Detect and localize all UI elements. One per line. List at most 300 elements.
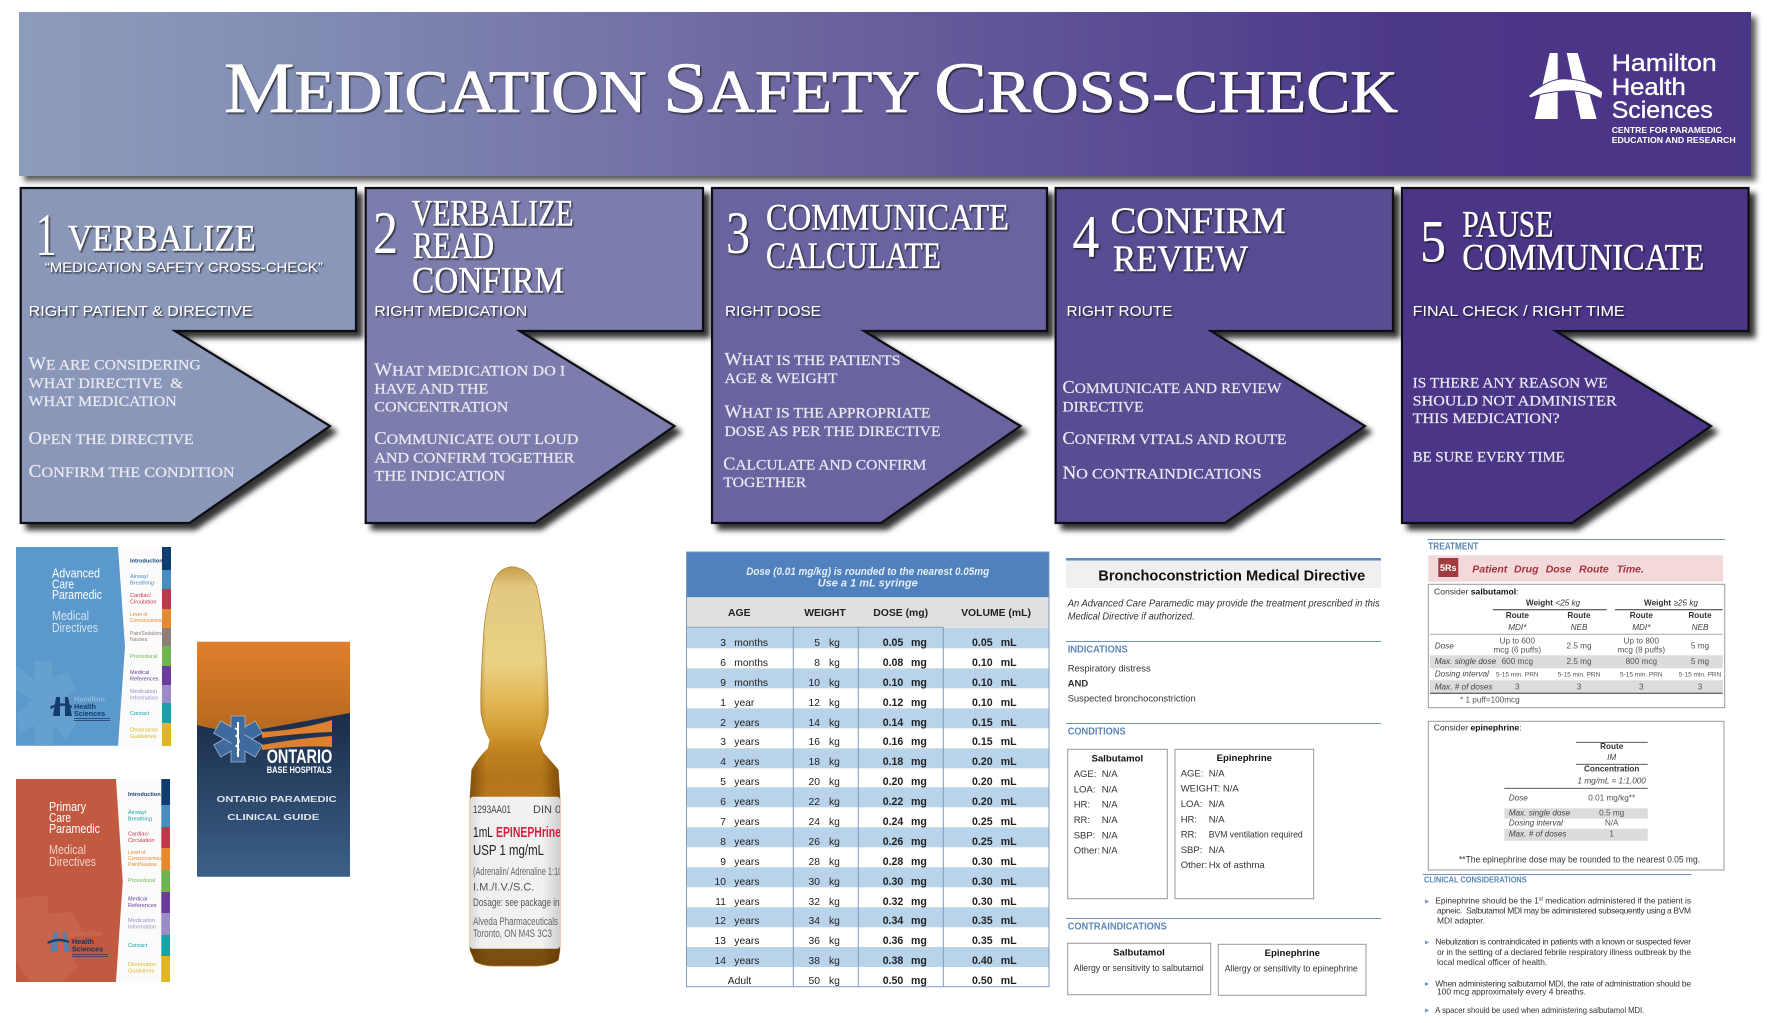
colour tabs	[161, 779, 170, 982]
salbutamol dosing table: Max. # of doses	[1435, 682, 1492, 691]
step 3 heading: 3	[726, 200, 750, 266]
volume column: 0.35	[972, 935, 993, 947]
weight column: 38	[809, 956, 820, 967]
weight column: kg	[829, 718, 840, 729]
age column: months	[734, 678, 768, 689]
step 5 body: THIS MEDICATION?	[1413, 411, 1560, 427]
volume column: 0.10	[972, 697, 993, 709]
dose column: 0.30	[883, 876, 903, 888]
step 4 heading: REVIEW	[1113, 239, 1248, 280]
salbutamol dosing table: 3	[1515, 682, 1520, 691]
epinephrine conditions box: BVM ventilation required	[1209, 830, 1303, 841]
title: MEDICATION SAFETY CROSS-CHECK	[224, 48, 1398, 128]
weight column: 34	[809, 916, 820, 927]
tab labels: Breathing	[130, 580, 154, 586]
treatment heading: TREATMENT	[1428, 541, 1478, 552]
contraindications section	[1066, 918, 1381, 995]
dose column	[883, 637, 927, 987]
salbutamol dosing table: 3	[1639, 682, 1644, 691]
weight column: kg	[829, 817, 840, 828]
label text	[473, 806, 560, 938]
weight column: 10	[809, 678, 820, 689]
logo wordmark: Sciences	[1612, 97, 1713, 124]
step 2 body	[374, 359, 578, 484]
step 2 heading: 2	[373, 200, 398, 266]
salbutamol dosing table: Weight ≥25 kg	[1644, 598, 1698, 607]
volume column: 0.20	[972, 756, 993, 768]
tab labels: Destination	[128, 962, 156, 968]
tab labels: Contact	[130, 711, 150, 717]
volume column: 0.25	[972, 816, 993, 828]
age column: 10	[715, 877, 726, 888]
salbutamol dosing table: 5-15 min. PRN	[1558, 672, 1601, 679]
step 3 body: WHAT IS THE APPROPRIATE	[724, 402, 930, 422]
step 1 heading	[29, 202, 323, 320]
consideration text: MDI adapter.	[1437, 915, 1485, 925]
weight column: 32	[809, 897, 820, 908]
label text: 1293AA01	[473, 804, 511, 816]
tab labels: Consciousness	[130, 618, 164, 624]
salbutamol dosing table: NEB	[1571, 623, 1588, 632]
column headers: AGE	[728, 608, 751, 619]
consideration text: A spacer should be used when administering salbutamol MDI.	[1435, 1005, 1644, 1015]
volume column: 0.30	[972, 856, 993, 868]
epinephrine conditions box	[1175, 749, 1314, 899]
arrow shape 3	[712, 188, 1047, 523]
column headers: VOLUME (mL)	[961, 608, 1031, 619]
logo wordmark: CENTRE FOR PARAMEDIC	[1612, 125, 1722, 135]
cover title: Care	[49, 810, 71, 825]
salbutamol dosing table: Max. single dose	[1435, 657, 1497, 666]
salbutamol dosing box	[1428, 584, 1725, 708]
epinephrine contraindication box	[1218, 944, 1366, 995]
dose column: mg	[911, 935, 927, 947]
volume column: mL	[1001, 915, 1017, 927]
clinical considerations	[1423, 874, 1692, 1015]
dose column: mg	[911, 876, 927, 888]
tab labels: Level of	[128, 850, 146, 856]
tab labels: Cardiac/	[130, 593, 151, 599]
step 4 body: COMMUNICATE AND REVIEW	[1062, 377, 1282, 397]
step 1 body: WE ARE CONSIDERING	[29, 354, 201, 374]
volume column: 0.20	[972, 796, 993, 808]
salbutamol dosing table: * 1 puff=100mcg	[1460, 696, 1520, 705]
cover title: Care	[52, 576, 74, 592]
5 Rs reminder bar: Dose	[1546, 564, 1572, 576]
tab labels: Introduction	[128, 792, 161, 798]
volume column: 0.40	[972, 955, 993, 967]
epinephrine conditions box: HR:	[1181, 814, 1197, 825]
age column: 12	[715, 916, 726, 927]
step 5 heading: FINAL CHECK / RIGHT TIME	[1413, 303, 1625, 320]
epinephrine conditions box: WEIGHT: N/A	[1181, 784, 1239, 795]
salbutamol conditions box: N/A	[1102, 830, 1118, 841]
epinephrine contraindication box: Allergy or sensitivity to epinephrine	[1225, 964, 1358, 975]
cover title: Paramedic	[52, 587, 102, 602]
step 2 body: THE INDICATION	[374, 468, 505, 484]
volume column: 0.15	[972, 717, 993, 729]
tab labels	[130, 558, 164, 740]
step 5 heading	[1413, 205, 1704, 320]
arrow shape 1	[21, 188, 356, 523]
volume column: mL	[1001, 955, 1017, 967]
book cover: primary care paramedic directives	[16, 779, 170, 982]
age column: years	[734, 857, 759, 868]
consideration text: When administering salbutamol MDI, the rate of administration should be	[1435, 978, 1691, 988]
epinephrine dosing table: 0.01 mg/kg**	[1588, 794, 1636, 803]
tab labels: Nausea	[130, 637, 147, 643]
weight column: kg	[829, 916, 840, 927]
age column: 2	[720, 718, 726, 729]
dose column: 0.38	[883, 955, 903, 967]
cover watermark	[16, 661, 78, 745]
salbutamol dosing table: 3	[1577, 682, 1582, 691]
step 3 body	[723, 349, 940, 491]
salbutamol dosing table: Dosing interval	[1435, 670, 1489, 679]
5 Rs reminder bar	[1428, 555, 1723, 582]
banner	[19, 12, 1751, 176]
step 3 body: CALCULATE AND CONFIRM	[723, 453, 926, 473]
age column: 11	[715, 897, 726, 908]
logo wordmark: EDUCATION AND RESEARCH	[1612, 135, 1736, 145]
colour tabs	[162, 547, 171, 746]
weight column: kg	[829, 877, 840, 888]
directive intro	[1067, 599, 1380, 622]
paper label	[470, 797, 560, 949]
label text: EPINEPHrine	[496, 824, 561, 841]
consideration text: local medical officer of health.	[1437, 957, 1547, 967]
epinephrine conditions box: Epinephrine	[1217, 753, 1272, 764]
dose column: 0.10	[883, 677, 903, 689]
dose column: 0.14	[883, 717, 903, 729]
5 Rs reminder bar: Time.	[1617, 564, 1644, 576]
clinical considerations: CLINICAL CONSIDERATIONS	[1424, 875, 1527, 885]
tab page background	[16, 547, 171, 746]
step 1 body: CONFIRM THE CONDITION	[29, 461, 235, 481]
dose column: 0.50	[883, 975, 903, 987]
weight column: 8	[814, 658, 820, 669]
weight column: kg	[829, 777, 840, 788]
age column: 7	[720, 817, 726, 828]
label text: DIN 02326	[533, 804, 586, 816]
age column	[715, 638, 768, 987]
age column: 1	[720, 698, 726, 709]
tab labels	[128, 792, 164, 974]
consideration text: or in the setting of a declared febrile respiratory illness outbreak by the	[1437, 947, 1691, 957]
volume column: 0.25	[972, 836, 993, 848]
weight column: kg	[829, 698, 840, 709]
weight column: kg	[829, 956, 840, 967]
weight column: 22	[809, 797, 820, 808]
salbutamol dosing table: Route	[1630, 611, 1653, 620]
epinephrine dosing table: N/A	[1605, 819, 1619, 828]
dose column: mg	[911, 756, 927, 768]
5 Rs reminder bar: 5Rs	[1440, 563, 1457, 573]
5 Rs reminder bar: Patient	[1472, 564, 1508, 576]
label text: 1mL	[473, 824, 493, 841]
dose column: mg	[911, 915, 927, 927]
glass edge shading	[470, 567, 560, 966]
salbutamol dosing table: mcg (6 puffs)	[1493, 646, 1541, 655]
tab labels: Pain/Sedation/	[130, 631, 163, 637]
weight column: 24	[809, 817, 820, 828]
salbutamol dosing table: 800 mcg	[1626, 657, 1657, 666]
salbutamol dosing table: Dose	[1435, 641, 1454, 650]
salbutamol contraindication box	[1068, 943, 1211, 995]
consideration text: medication administered if the patient is	[1543, 895, 1691, 905]
step 3 body: AGE & WEIGHT	[724, 371, 838, 387]
tab labels: Guidelines	[128, 968, 155, 974]
tab labels: Procedural	[130, 654, 157, 660]
guide title: ONTARIO PARAMEDIC	[217, 795, 337, 804]
step 2 body: HAVE AND THE	[374, 382, 488, 398]
age column: years	[734, 737, 759, 748]
label text: I.M./I.V./S.C.	[473, 882, 534, 894]
conditions section	[1066, 723, 1381, 899]
volume column: mL	[1001, 677, 1017, 689]
navy wave body	[197, 713, 350, 877]
arrow shape 2	[366, 188, 703, 523]
salbutamol conditions box: N/A	[1102, 846, 1118, 857]
weight column: kg	[829, 857, 840, 868]
age column: months	[734, 638, 768, 649]
dose column: mg	[911, 856, 927, 868]
step 4 body: CONFIRM VITALS AND ROUTE	[1062, 428, 1286, 448]
epinephrine conditions box: AGE:	[1181, 768, 1203, 779]
column headers: WEIGHT	[804, 608, 846, 619]
step 3 body: TOGETHER	[723, 475, 806, 491]
step 1 heading: RIGHT PATIENT & DIRECTIVE	[29, 303, 253, 320]
salbutamol conditions box: N/A	[1102, 815, 1118, 826]
banner background	[19, 12, 1751, 176]
indications section: INDICATIONS	[1068, 644, 1128, 656]
salbutamol conditions box: N/A	[1102, 800, 1118, 811]
age column: year	[734, 698, 755, 709]
tab labels: Pain/Nausea	[128, 862, 157, 868]
volume column	[972, 637, 1017, 987]
step 1 body	[29, 354, 235, 481]
dose column: mg	[911, 975, 927, 987]
dose column: 0.08	[883, 657, 903, 669]
salbutamol dosing table: 5 mg	[1691, 657, 1710, 666]
column headers: DOSE (mg)	[873, 608, 928, 619]
dose column: 0.18	[883, 756, 903, 768]
logo wordmark	[1612, 50, 1736, 145]
epinephrine dosing table: 0.5 mg	[1599, 809, 1625, 818]
weight column: 14	[809, 718, 820, 729]
consideration text: apneic. Salbutamol MDI may be administered subsequently using a BVM	[1437, 905, 1691, 915]
ontario wordmark	[267, 747, 332, 776]
salbutamol contraindication box: Salbutamol	[1113, 947, 1165, 958]
star of life	[214, 716, 262, 762]
epinephrine dosing table: Dose	[1509, 794, 1528, 803]
volume column: 0.20	[972, 776, 993, 788]
dose column: mg	[911, 637, 927, 649]
column headers	[686, 597, 1049, 627]
book cover: advanced care paramedic directives	[16, 547, 171, 746]
epinephrine conditions box: Other:	[1181, 860, 1207, 871]
epinephrine conditions box: Hx of asthma	[1209, 860, 1265, 871]
weight column: kg	[829, 678, 840, 689]
epinephrine dosing table: Max. single dose	[1509, 809, 1571, 818]
cover title: Paramedic	[49, 821, 100, 836]
dose column: mg	[911, 677, 927, 689]
volume column: 0.30	[972, 876, 993, 888]
epinephrine dosing table: IM	[1607, 753, 1616, 762]
salbutamol dosing table: 2.5 mg	[1566, 641, 1592, 650]
epinephrine dosing box	[1428, 721, 1724, 870]
age column: months	[734, 658, 768, 669]
salbutamol conditions box: LOA:	[1074, 784, 1095, 795]
weight column: kg	[829, 837, 840, 848]
tab labels: Medical	[130, 670, 149, 676]
volume column: 0.10	[972, 657, 993, 669]
age column: years	[734, 837, 759, 848]
tab labels: Level of	[130, 612, 148, 618]
weight column: kg	[829, 897, 840, 908]
age column: 9	[720, 857, 726, 868]
age column: years	[734, 777, 759, 788]
epinephrine dosing table: Route	[1600, 742, 1624, 751]
tab labels: Consciousness/	[128, 856, 164, 862]
cover title: Primary	[49, 799, 86, 814]
cover title: Directives	[49, 854, 96, 869]
salbutamol dosing table: MDI*	[1508, 623, 1527, 632]
salbutamol dosing table: 2.5 mg	[1566, 657, 1592, 666]
weight column: 26	[809, 837, 820, 848]
epinephrine conditions box: N/A	[1209, 799, 1225, 810]
book cover: ontario paramedic clinical guide	[197, 642, 350, 877]
epinephrine conditions box: N/A	[1209, 814, 1225, 825]
salbutamol conditions box: Other:	[1074, 846, 1100, 857]
dose column: mg	[911, 816, 927, 828]
dose column: mg	[911, 697, 927, 709]
step 2 heading	[373, 194, 574, 320]
orange stripes	[262, 720, 332, 750]
volume column: mL	[1001, 896, 1017, 908]
directive intro: Medical Directive if authorized.	[1068, 611, 1195, 622]
epinephrine rounding note: **The epinephrine dose may be rounded to the nearest 0.05 mg.	[1459, 854, 1700, 864]
salbutamol contraindication box: Allergy or sensitivity to salbutamol	[1074, 963, 1204, 974]
volume column: mL	[1001, 975, 1017, 987]
salbutamol conditions box: N/A	[1102, 784, 1118, 795]
age column: 3	[720, 638, 726, 649]
step 2 body: COMMUNICATE OUT LOUD	[374, 428, 578, 448]
volume column: mL	[1001, 736, 1017, 748]
cover title: Medical	[49, 842, 86, 857]
directive title bar: Bronchoconstriction Medical Directive	[1098, 568, 1365, 585]
salbutamol conditions box: HR:	[1074, 800, 1090, 811]
step 1 body: WHAT DIRECTIVE &	[29, 376, 183, 392]
salbutamol dosing table: MDI*	[1632, 623, 1651, 632]
weight column: kg	[829, 797, 840, 808]
cover title: Advanced	[52, 566, 100, 581]
weight column: kg	[829, 737, 840, 748]
age column: 4	[720, 757, 726, 768]
dose table	[686, 552, 1049, 987]
tab labels: Medication	[130, 689, 157, 695]
dose column: 0.12	[883, 697, 903, 709]
cover title: Directives	[52, 620, 98, 635]
tab labels: Information	[128, 924, 156, 930]
weight column: 28	[809, 857, 820, 868]
tab labels: Medical	[128, 896, 147, 902]
volume column: 0.35	[972, 915, 993, 927]
age column: years	[734, 916, 759, 927]
age column: 14	[715, 956, 726, 967]
weight column: 30	[809, 877, 820, 888]
dose column: mg	[911, 796, 927, 808]
indications section	[1066, 641, 1381, 705]
salbutamol dosing box: Consider salbutamol:	[1434, 587, 1519, 597]
volume column: 0.50	[972, 975, 993, 987]
dose column: 0.34	[883, 915, 903, 927]
age column: 6	[720, 797, 726, 808]
treatment document	[1423, 539, 1725, 1015]
cover logo: Sciences	[72, 944, 103, 954]
age column: years	[734, 956, 759, 967]
consideration text: st	[1539, 896, 1543, 902]
step 5 body: BE SURE EVERY TIME	[1413, 449, 1565, 465]
epinephrine conditions box: N/A	[1209, 768, 1225, 779]
age column: years	[734, 718, 759, 729]
table grid	[686, 552, 1049, 987]
step 4 heading: RIGHT ROUTE	[1066, 303, 1172, 320]
salbutamol dosing table: 3	[1698, 682, 1703, 691]
weight column: kg	[829, 757, 840, 768]
weight column: 16	[809, 737, 820, 748]
salbutamol conditions box: AGE:	[1074, 769, 1096, 780]
volume column: 0.15	[972, 736, 993, 748]
step 5 body: IS THERE ANY REASON WE	[1413, 375, 1608, 391]
weight column: kg	[829, 658, 840, 669]
weight column: kg	[829, 976, 840, 987]
volume column: mL	[1001, 836, 1017, 848]
volume column: mL	[1001, 776, 1017, 788]
age column: years	[734, 817, 759, 828]
volume column: 0.05	[972, 637, 993, 649]
dose column: 0.28	[883, 856, 903, 868]
volume column: mL	[1001, 876, 1017, 888]
dose column: 0.32	[883, 896, 903, 908]
step 3 heading: RIGHT DOSE	[725, 303, 821, 320]
step 5 heading: COMMUNICATE	[1462, 237, 1704, 278]
cover watermark	[16, 896, 84, 982]
step 2 body: CONCENTRATION	[374, 400, 508, 416]
salbutamol dosing table: 5 mg	[1691, 641, 1710, 650]
dose column: 0.05	[883, 637, 903, 649]
consideration text: Nebulization is contraindicated in patients with a known or suspected fever	[1435, 937, 1691, 947]
step 4 heading: CONFIRM	[1111, 201, 1286, 242]
step 5 body: SHOULD NOT ADMINISTER	[1413, 393, 1617, 409]
ontario wordmark: ONTARIO	[267, 747, 332, 768]
salbutamol conditions box	[1068, 749, 1167, 899]
indications section: Respiratory distress	[1068, 664, 1151, 675]
age column: 3	[720, 737, 726, 748]
dose column: mg	[911, 836, 927, 848]
panel: step 4 confirm review	[1056, 188, 1393, 523]
dose column: 0.24	[883, 816, 903, 828]
dose column: mg	[911, 955, 927, 967]
salbutamol dosing table: Route	[1506, 611, 1529, 620]
age column: Adult	[728, 976, 751, 987]
indications section: AND	[1068, 679, 1088, 690]
tab labels: References	[130, 676, 159, 682]
weight column: 12	[809, 698, 820, 709]
salbutamol dosing table: NEB	[1692, 623, 1709, 632]
age column: 9	[720, 678, 726, 689]
epinephrine conditions box: N/A	[1209, 845, 1225, 856]
